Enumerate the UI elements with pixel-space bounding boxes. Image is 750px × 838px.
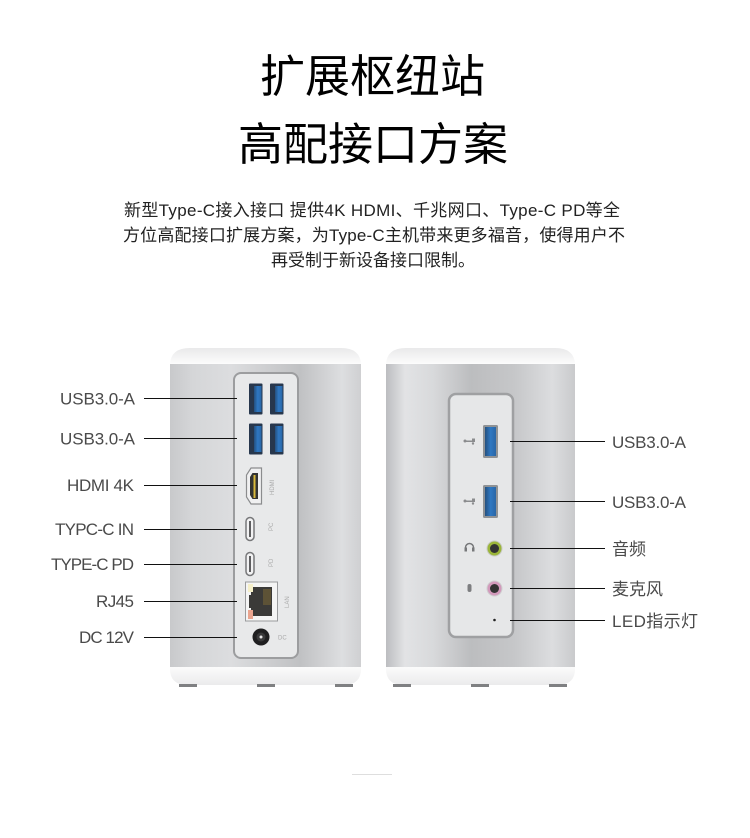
left callouts [51, 390, 237, 647]
label: RJ45: RJ45 [96, 592, 134, 611]
device: front view [386, 348, 575, 687]
label: HDMI 4K: HDMI 4K [67, 476, 135, 495]
port panel [449, 394, 513, 637]
USB port 1 [483, 425, 498, 458]
top cap [386, 348, 575, 364]
HDMI port [246, 468, 276, 504]
HDMI port: HDMI [270, 479, 276, 495]
USB port 2 [483, 485, 498, 518]
title: 高配接口方案 [238, 119, 508, 170]
audio jack [487, 541, 502, 556]
description text [123, 201, 625, 270]
mic jack [487, 581, 502, 596]
base [386, 667, 575, 685]
DC jack: DC [278, 636, 287, 642]
USB ports upper pair [249, 384, 284, 414]
icon: headphones [464, 544, 474, 552]
label: USB3.0-A second: USB3.0-A [612, 493, 687, 512]
description text: 再受制于新设备接口限制。 [271, 251, 475, 270]
DC jack [252, 628, 287, 646]
RJ45 port [246, 582, 291, 621]
USB symbol 2 [464, 498, 475, 505]
label: TYPC-C IN: TYPC-C IN [55, 520, 134, 539]
top cap [170, 348, 361, 364]
base [170, 667, 361, 685]
label: TYPE-C PD: TYPE-C PD [51, 555, 134, 574]
port panel [234, 373, 298, 658]
feet [393, 684, 567, 687]
label: USB3.0-A: USB3.0-A [60, 390, 136, 408]
aluminium body [386, 364, 575, 667]
right callouts [510, 433, 698, 631]
label: 麦克风: 麦克风 [612, 580, 663, 599]
LED dot [493, 619, 496, 621]
USB symbol 1 [464, 438, 475, 445]
RJ45 port: LAN [285, 596, 291, 608]
description text: 方位高配接口扩展方案，为Type-C主机带来更多福音，使得用户不 [123, 225, 625, 245]
label: LED指示灯: LED指示灯 [612, 612, 698, 631]
device: rear view [170, 348, 361, 687]
description text: 新型Type-C接入接口 提供4K HDMI、千兆网口、Type-C PD等全 [124, 201, 620, 220]
label: USB3.0-A second: USB3.0-A [60, 430, 136, 448]
label: 音频: 音频 [612, 540, 646, 559]
aluminium body [170, 364, 361, 667]
title: 扩展枢纽站 [260, 51, 485, 102]
Type-C PD port [246, 552, 275, 576]
label: DC 12V: DC 12V [79, 628, 135, 647]
icon: microphone [468, 584, 472, 592]
label: USB3.0-A: USB3.0-A [612, 433, 687, 452]
Type-C PC port: PC [269, 522, 275, 531]
feet [179, 684, 353, 687]
USB ports lower pair [249, 424, 284, 454]
Type-C PC port [246, 518, 275, 540]
title [238, 51, 508, 170]
Type-C PD port: PD [269, 558, 275, 567]
